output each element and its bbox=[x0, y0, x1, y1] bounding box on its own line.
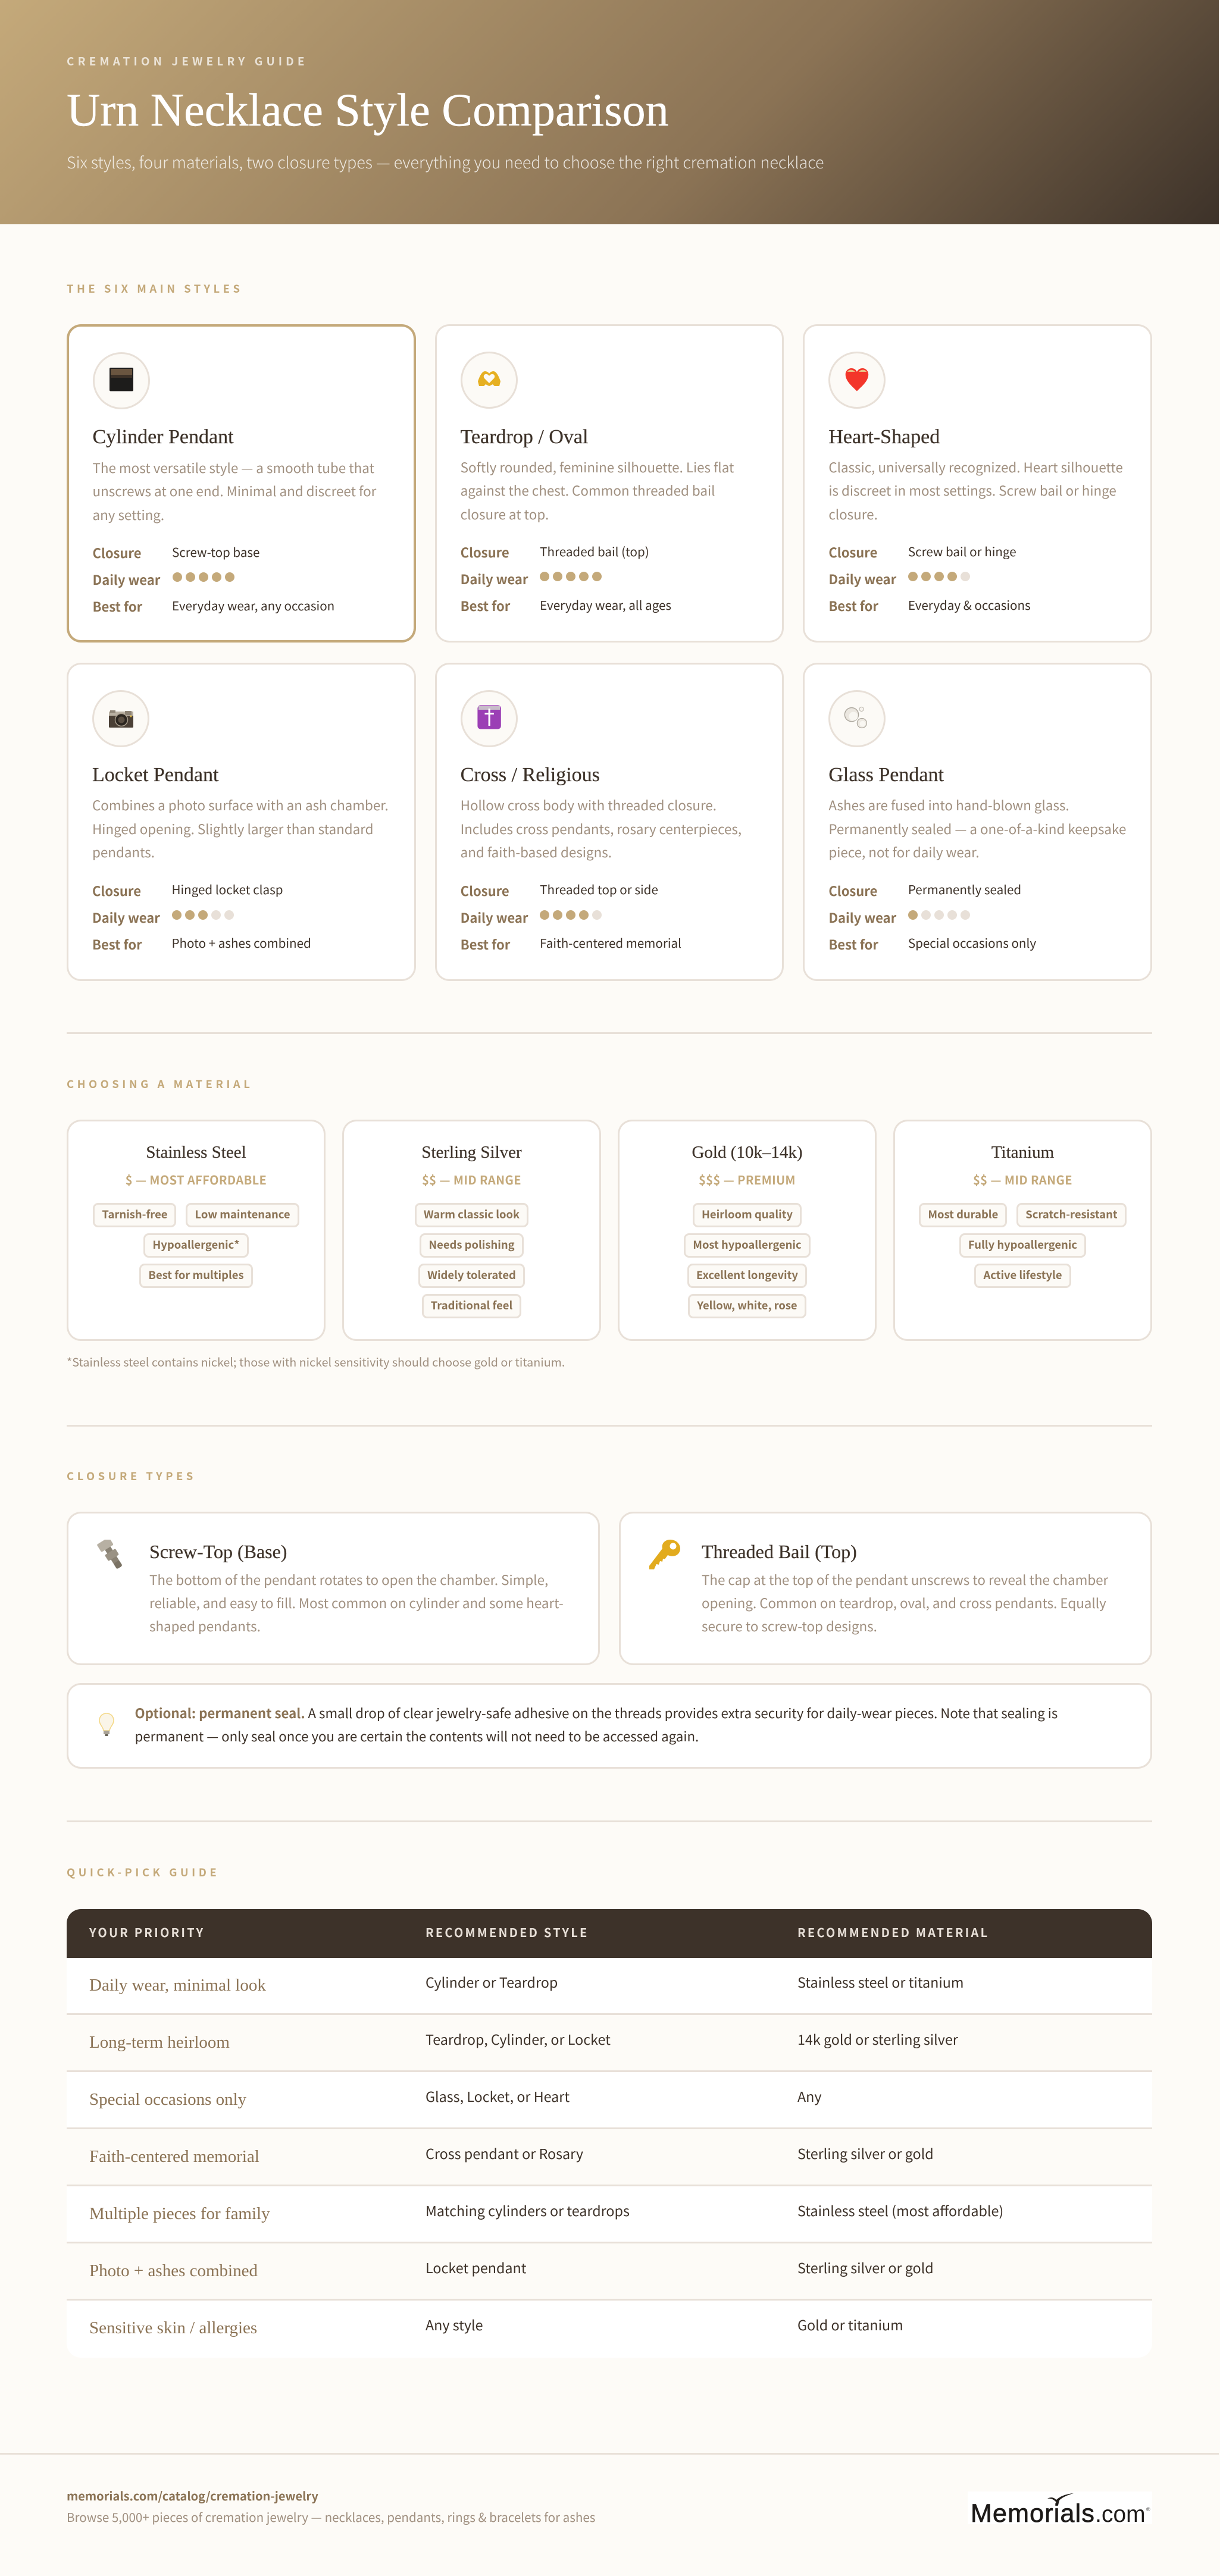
icon: bolt bbox=[97, 1540, 123, 1569]
row: heirloom bbox=[67, 2015, 1152, 2072]
header banner bbox=[0, 0, 1219, 224]
panel: teardrop oval: Closure bbox=[461, 543, 509, 562]
panel: heart shaped: Best for bbox=[828, 596, 878, 615]
section heading: six styles: THE SIX MAIN STYLES bbox=[67, 281, 243, 296]
icon: cross bbox=[461, 690, 518, 747]
row: faith: Sterling silver or gold bbox=[797, 2143, 934, 2163]
panel: teardrop oval: Everyday wear, all ages bbox=[540, 596, 671, 613]
panel: gold: $$$ — PREMIUM bbox=[699, 1171, 796, 1188]
panel: cylinder pendant: Cylinder Pendant bbox=[93, 426, 234, 448]
panel: gold: Gold (10k–14k) bbox=[692, 1143, 803, 1162]
row: sensitive skin: Gold or titanium bbox=[797, 2314, 903, 2334]
row: special occasions bbox=[67, 2072, 1152, 2129]
subtitle: Six styles, four materials, two closure types — everything you need to choose the right cremation necklace bbox=[67, 150, 824, 173]
tags: gold: Excellent longevity bbox=[696, 1267, 798, 1283]
panel: glass pendant bbox=[803, 663, 1152, 980]
panel: teardrop oval: closure at top. bbox=[461, 504, 549, 524]
row: multiples: Multiple pieces for family bbox=[89, 2204, 270, 2223]
footnote: *Stainless steel contains nickel; those with nickel sensitivity should choose gold or titanium. bbox=[67, 1353, 565, 1370]
panel: cross religious: Faith-centered memorial bbox=[540, 933, 681, 951]
panel: locket pendant: Photo + ashes combined bbox=[171, 933, 311, 951]
panel: screw-top: The bottom of the pendant rotates to open the chamber. Simple, bbox=[149, 1570, 548, 1589]
panel: cross religious: and faith-based designs. bbox=[461, 842, 612, 861]
row: heirloom: Long-term heirloom bbox=[89, 2033, 230, 2052]
row: heirloom: 14k gold or sterling silver bbox=[797, 2029, 958, 2049]
panel: glass pendant: Glass Pendant bbox=[828, 764, 944, 786]
panel: glass pendant: Daily wear bbox=[828, 908, 896, 927]
row: daily wear: Cylinder or Teardrop bbox=[426, 1972, 558, 1992]
panel: threaded bail: The cap at the top of the pendant unscrews to reveal the chamber bbox=[702, 1570, 1108, 1589]
panel: sterling silver bbox=[342, 1120, 601, 1341]
row: photo: Sterling silver or gold bbox=[797, 2257, 934, 2277]
table header bbox=[67, 1909, 1152, 1958]
panel: titanium bbox=[893, 1120, 1152, 1341]
section heading: materials: CHOOSING A MATERIAL bbox=[67, 1076, 253, 1092]
panel: heart shaped: Closure bbox=[828, 543, 877, 562]
panel: teardrop oval: against the chest. Common threaded bail bbox=[461, 481, 715, 500]
panel: teardrop oval: Best for bbox=[461, 596, 510, 615]
panel: heart shaped bbox=[803, 324, 1152, 643]
panel: threaded bail: secure to screw-top designs. bbox=[702, 1616, 877, 1635]
panel: cross religious: Closure bbox=[461, 881, 509, 900]
panel: titanium: $$ — MID RANGE bbox=[973, 1171, 1072, 1188]
tags: sterling silver: Warm classic look bbox=[424, 1206, 520, 1222]
panel: sterling silver: $$ — MID RANGE bbox=[422, 1171, 521, 1188]
panel: stainless steel bbox=[67, 1120, 326, 1341]
panel: locket pendant: Locket Pendant bbox=[92, 764, 218, 786]
table header: RECOMMENDED MATERIAL bbox=[797, 1923, 989, 1941]
panel: cross religious bbox=[435, 663, 784, 980]
panel: cross religious: Cross / Religious bbox=[461, 764, 600, 786]
panel: glass pendant: piece, not for daily wear. bbox=[828, 842, 980, 861]
panel: locket pendant: Hinged locket clasp bbox=[171, 880, 283, 898]
tags: titanium: Fully hypoallergenic bbox=[968, 1237, 1077, 1252]
tags: sterling silver: Traditional feel bbox=[431, 1298, 512, 1313]
panel: cylinder pendant: Daily wear bbox=[93, 570, 160, 589]
table: quick-pick guide bbox=[67, 1909, 1152, 2358]
tags: titanium: Most durable bbox=[928, 1206, 998, 1222]
row: multiples bbox=[67, 2186, 1152, 2243]
panel: locket pendant: Closure bbox=[92, 881, 141, 900]
panel: cylinder pendant: Closure bbox=[93, 543, 142, 562]
panel: heart shaped: is discreet in most settings. Screw bail or hinge bbox=[828, 481, 1116, 500]
panel: glass pendant: Closure bbox=[828, 881, 877, 900]
icon: glass bubbles bbox=[828, 690, 886, 747]
section heading: closure types: CLOSURE TYPES bbox=[67, 1468, 196, 1484]
panel: heart shaped: Heart-Shaped bbox=[828, 426, 940, 447]
panel: teardrop oval: Teardrop / Oval bbox=[461, 426, 588, 447]
row: faith bbox=[67, 2129, 1152, 2186]
panel: stainless steel: $ — MOST AFFORDABLE bbox=[126, 1171, 267, 1188]
logo: memorials.com bbox=[968, 2492, 1152, 2524]
panel: screw-top: Screw-Top (Base) bbox=[149, 1541, 287, 1562]
row: faith: Cross pendant or Rosary bbox=[426, 2143, 583, 2163]
row: sensitive skin: Sensitive skin / allergies bbox=[89, 2318, 257, 2337]
row: daily wear: Stainless steel or titanium bbox=[797, 1972, 964, 1992]
tags: gold bbox=[684, 1203, 811, 1318]
panel: sterling silver: Sterling Silver bbox=[421, 1143, 522, 1162]
panel: cross religious: Threaded top or side bbox=[540, 880, 658, 898]
tags: gold: Heirloom quality bbox=[702, 1206, 793, 1222]
panel: teardrop oval: Threaded bail (top) bbox=[540, 542, 649, 560]
row: sensitive skin bbox=[89, 2314, 903, 2337]
panel: glass pendant: Ashes are fused into hand-blown glass. bbox=[828, 795, 1069, 814]
panel: cross religious: Daily wear bbox=[461, 908, 528, 927]
title: Urn Necklace Style Comparison bbox=[67, 84, 669, 136]
panel: locket pendant: Combines a photo surface with an ash chamber. bbox=[92, 795, 389, 814]
panel: heart shaped: Everyday & occasions bbox=[908, 596, 1031, 613]
icon: heart hands bbox=[461, 352, 518, 409]
panel: cross religious: Hollow cross body with threaded closure. bbox=[461, 795, 717, 814]
row: faith: Faith-centered memorial bbox=[89, 2147, 259, 2166]
row: multiples: Stainless steel (most affordable) bbox=[797, 2200, 1003, 2220]
row: special occasions: Glass, Locket, or Heart bbox=[426, 2086, 570, 2106]
tags: sterling silver bbox=[415, 1203, 528, 1318]
panel: teardrop oval: Daily wear bbox=[461, 569, 528, 588]
tags: gold: Yellow, white, rose bbox=[697, 1298, 797, 1313]
row: multiples: Matching cylinders or teardrops bbox=[426, 2200, 630, 2220]
panel: teardrop oval: Softly rounded, feminine silhouette. Lies flat bbox=[461, 457, 734, 476]
footer bbox=[0, 2453, 1219, 2576]
footer link: memorials.com/catalog/cremation-jewelry bbox=[67, 2487, 318, 2504]
panel: locket pendant: Best for bbox=[92, 935, 142, 954]
panel: glass pendant: Permanently sealed bbox=[908, 880, 1021, 898]
row: photo: Locket pendant bbox=[426, 2257, 527, 2277]
callout: optional permanent seal: Optional: permanent seal. A small drop of clear jewelry-safe adhesive on the threads provides extra security for daily-wear pieces. Note that sealing is bbox=[134, 1703, 1058, 1722]
panel: cylinder pendant: Everyday wear, any occasion bbox=[172, 596, 334, 614]
tags: stainless steel bbox=[93, 1203, 299, 1288]
tags: stainless steel: Hypoallergenic* bbox=[152, 1237, 240, 1252]
tags: sterling silver: Widely tolerated bbox=[427, 1267, 516, 1283]
panel: teardrop oval bbox=[435, 324, 784, 643]
row: photo bbox=[67, 2243, 1152, 2301]
eyebrow: CREMATION JEWELRY GUIDE bbox=[67, 53, 308, 69]
panel: gold bbox=[618, 1120, 877, 1341]
row: heirloom: Teardrop, Cylinder, or Locket bbox=[426, 2029, 611, 2049]
icon: key bbox=[649, 1540, 680, 1569]
panel: threaded bail: Threaded Bail (Top) bbox=[702, 1541, 857, 1562]
table header: YOUR PRIORITY bbox=[89, 1923, 205, 1941]
row: daily wear bbox=[67, 1958, 1152, 2015]
icon: light bulb bbox=[99, 1713, 114, 1736]
panel: glass pendant: Special occasions only bbox=[908, 933, 1036, 951]
panel: cross religious: Includes cross pendants, rosary centerpieces, bbox=[461, 819, 742, 838]
row: special occasions: Special occasions only bbox=[89, 2090, 246, 2109]
tags: titanium: Active lifestyle bbox=[983, 1267, 1062, 1283]
panel: screw-top bbox=[67, 1512, 600, 1665]
logo: memorials.com: ® bbox=[1146, 2506, 1150, 2512]
panel: heart shaped: Classic, universally recognized. Heart silhouette bbox=[828, 457, 1123, 476]
tags: titanium: Scratch-resistant bbox=[1025, 1206, 1118, 1222]
panel: threaded bail bbox=[619, 1512, 1152, 1665]
panel: locket pendant bbox=[67, 663, 416, 980]
panel: cylinder pendant: The most versatile style — a smooth tube that bbox=[93, 458, 374, 477]
panel: glass pendant: Best for bbox=[828, 935, 878, 954]
panel: locket pendant: Hinged opening. Slightly larger than standard bbox=[92, 819, 374, 838]
panel: cylinder pendant: Screw-top base bbox=[172, 543, 259, 560]
panel: glass pendant: Permanently sealed — a one-of-a-kind keepsake bbox=[828, 819, 1126, 838]
panel: stainless steel: Stainless Steel bbox=[146, 1143, 246, 1162]
section heading: quick-pick guide: QUICK-PICK GUIDE bbox=[67, 1864, 220, 1880]
callout: optional permanent seal bbox=[67, 1683, 1152, 1769]
row: special occasions: Any bbox=[797, 2086, 822, 2106]
row: photo: Photo + ashes combined bbox=[89, 2261, 258, 2280]
panel: screw-top: shaped pendants. bbox=[149, 1616, 261, 1635]
tags: gold: Most hypoallergenic bbox=[693, 1237, 802, 1252]
tags: stainless steel: Low maintenance bbox=[195, 1206, 290, 1222]
icon: camera bbox=[92, 690, 149, 747]
table header: RECOMMENDED STYLE bbox=[426, 1923, 589, 1941]
tags: sterling silver: Needs polishing bbox=[428, 1237, 515, 1252]
logo: memorials.com: Memorials.com bbox=[971, 2499, 1146, 2528]
tags: stainless steel: Best for multiples bbox=[148, 1267, 244, 1283]
panel: cylinder pendant bbox=[67, 324, 416, 643]
panel: cross religious: Best for bbox=[461, 935, 510, 954]
panel: titanium: Titanium bbox=[991, 1143, 1054, 1162]
icon: cylinder bbox=[93, 352, 150, 409]
row: daily wear: Daily wear, minimal look bbox=[89, 1976, 266, 1995]
tags: stainless steel: Tarnish-free bbox=[102, 1206, 167, 1222]
callout: optional permanent seal: permanent — only seal once you are certain the contents will not need to be accessed again. bbox=[134, 1726, 699, 1745]
panel: threaded bail: opening. Common on teardrop, oval, and cross pendants. Equally bbox=[702, 1593, 1106, 1612]
panel: heart shaped: closure. bbox=[828, 504, 878, 524]
row: sensitive skin: Any style bbox=[426, 2314, 483, 2334]
tags: titanium bbox=[919, 1203, 1127, 1288]
icon: heart bbox=[828, 352, 886, 409]
panel: heart shaped: Daily wear bbox=[828, 569, 896, 588]
footer tagline: Browse 5,000+ pieces of cremation jewelry — necklaces, pendants, rings & bracelets for ashes bbox=[67, 2508, 595, 2525]
panel: locket pendant: Daily wear bbox=[92, 908, 160, 927]
panel: cylinder pendant: any setting. bbox=[93, 504, 164, 524]
panel: cylinder pendant: Best for bbox=[93, 597, 142, 616]
panel: cylinder pendant: unscrews at one end. Minimal and discreet for bbox=[93, 481, 376, 500]
panel: locket pendant: pendants. bbox=[92, 842, 155, 861]
panel: screw-top: reliable, and easy to fill. Most common on cylinder and some heart- bbox=[149, 1593, 564, 1612]
panel: heart shaped: Screw bail or hinge bbox=[908, 542, 1016, 560]
